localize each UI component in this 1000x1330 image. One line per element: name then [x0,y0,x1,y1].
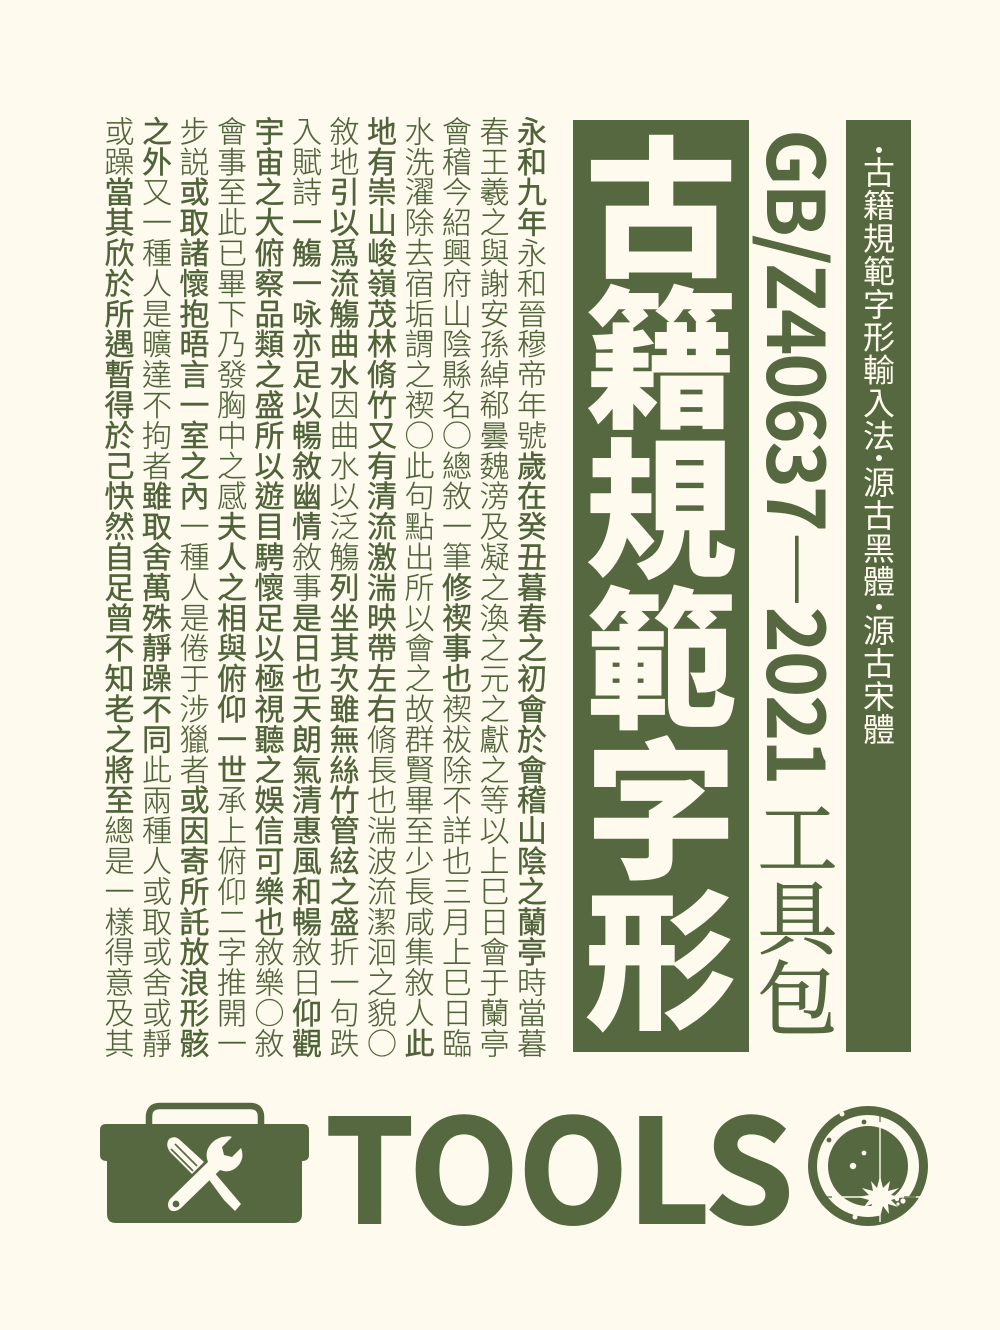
description text: tool name: 古籍規範字形輸入法 [856,156,902,452]
panel: right description bar [846,120,911,1052]
panel: main title banner [573,120,749,1052]
text column 5: 地有崇山峻嶺茂林脩竹又有清流激湍映帶左右 脩長也湍波流潔洄之貌○ [360,116,404,1058]
dot separator 1 [876,147,882,153]
dot separator 2 [876,455,882,461]
wrench [168,1136,242,1211]
toolbox handle [149,1106,261,1126]
text column 2: 春王羲之與謝安孫綽郗曇魏滂及凝之渙之元之獻之等以上巳日會于蘭亭 [472,116,516,1058]
text column 10: 步説 或取諸懷抱晤言一室之內 一種人是倦于涉獵者 或因寄所託放浪形骸 [172,116,216,1058]
wrench hole [173,1201,179,1207]
main title: 古籍規範字形 [551,131,771,1033]
screwdriver grooves [171,1144,197,1171]
description text: source serif: 源古宋體 [856,614,902,746]
description text: source sans: 源古黑體 [856,466,902,598]
dot separator 3 [876,604,882,610]
text column 6: 敘地 引以爲流觴曲水 因曲水以泛觴 列坐其次雖無絲竹管絃之盛 折一句跌 [322,116,366,1058]
toolbox lid and body [100,1124,309,1223]
icon: round starburst logo [808,1106,928,1226]
subtitle: toolkit: 工具包 [740,797,855,1037]
logo starburst [858,1176,902,1217]
text column 12: 或躁 當其欣於所遇暫得於己快然自足曾不知老之將至 總是一樣得意及其 [98,116,142,1058]
text column 4: 水洗濯除去宿垢謂之禊○此句點出所以會之故群賢畢至少長咸集敘人 此 [398,116,442,1058]
subtitle: standard number: GB/Z40637—2021 [744,129,859,783]
wordmark: TOOLS: TOOLS [325,1058,793,1265]
panel: classical text columns [98,116,554,1058]
text column 3: 會稽今紹興府山陰縣名○總敘一筆 修禊事也 禊祓除不詳也三月上巳日臨 [435,116,479,1058]
logo ring [822,1120,914,1212]
text column 8: 宇宙之大俯察品類之盛所以遊目騁懷足以極視聽之娛信可樂也 敘樂○敘 [248,116,292,1058]
icon: toolbox [100,1102,309,1223]
text column 7: 入賦詩 一觴一咏亦足以暢敘幽情 敘事 是日也天朗氣清惠風和暢 敘日 仰觀 [285,116,329,1058]
text column 1: 永和九年 永和晉穆帝年號 歲在癸丑暮春之初會於會稽山陰之蘭亭 時當暮 [510,116,554,1058]
logo dots [840,1112,906,1220]
logo disc [808,1106,928,1226]
logo cross lines [820,1108,920,1222]
text column 11: 之外 又一種人是曠達不拘者 雖取舍萬殊靜躁不同 此兩種人或取或舍或靜 [135,116,179,1058]
text column 9: 會事至此已畢下乃發胸中之感 夫人之相與俯仰一世 承上俯仰二字推開一 [210,116,254,1058]
screwdriver [167,1137,241,1211]
